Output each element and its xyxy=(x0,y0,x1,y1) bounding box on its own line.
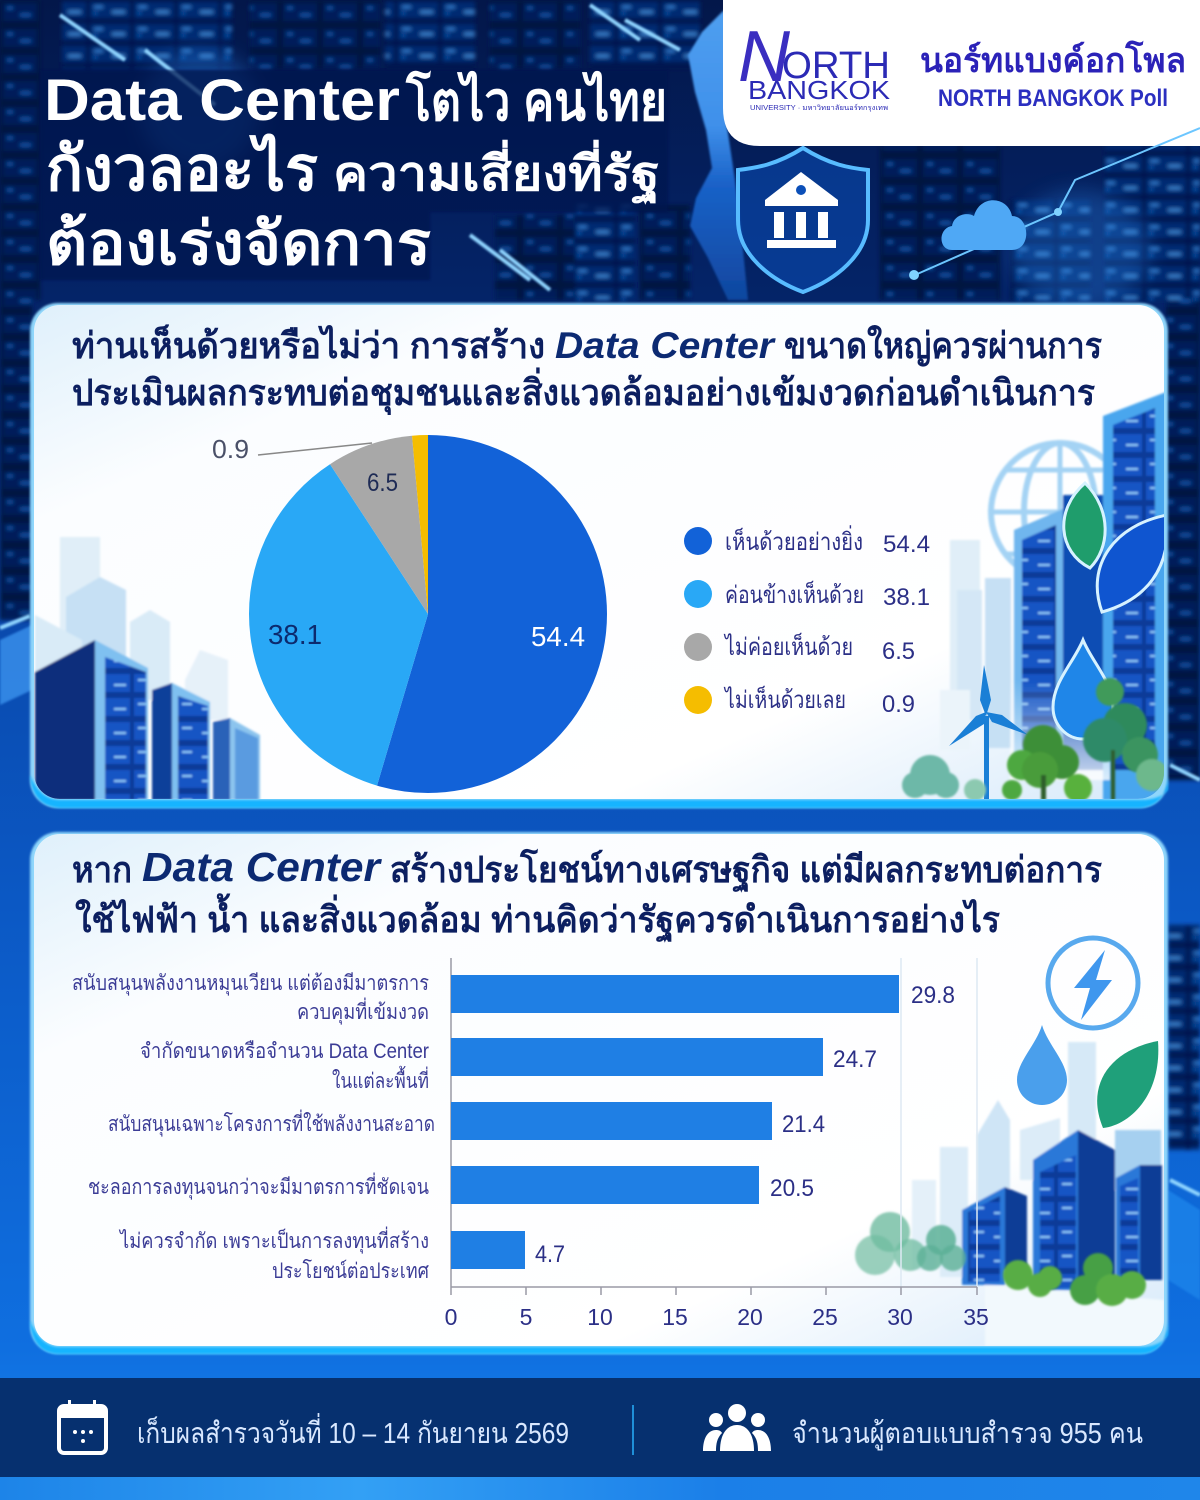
respondents: จำนวนผู้ตอบแบบสำรวจ 955 คน xyxy=(792,1418,1143,1451)
category labels: สนับสนุนพลังงานหมุนเวียน แต่ต้องมีมาตรการ xyxy=(72,972,429,996)
icon: water drop xyxy=(1017,1025,1067,1105)
axis labels: 10 xyxy=(587,1304,613,1330)
title block: ต้องเร่งจัดการ xyxy=(46,210,431,277)
footer band xyxy=(0,1378,1200,1500)
bar values: 20.5 xyxy=(770,1175,814,1202)
illustration: energy, water, data center xyxy=(855,938,1164,1346)
category labels xyxy=(72,972,435,1283)
axis labels: 20 xyxy=(737,1304,763,1330)
pie labels: 6.5 xyxy=(367,469,398,497)
axis labels: 5 xyxy=(520,1304,532,1330)
title block: โตไว คนไทย xyxy=(405,70,667,132)
panel: government action question xyxy=(30,832,1168,1354)
bar values: 24.7 xyxy=(833,1046,877,1073)
legend: ไม่ค่อยเห็นด้วย xyxy=(723,632,853,661)
icon: blue leaf xyxy=(1097,515,1168,612)
logo: North Bangkok University: UNIVERSITY · มหาวิทยาลัยนอร์ทกรุงเทพ xyxy=(750,104,888,112)
icon: government shield xyxy=(738,148,868,292)
trees xyxy=(902,678,1168,802)
icon: lightning bolt in circle xyxy=(1048,938,1138,1028)
illustration: data centers left xyxy=(35,537,260,800)
pie labels: 0.9 xyxy=(212,434,249,464)
category labels: ประโยชน์ต่อประเทศ xyxy=(272,1259,430,1283)
heading: question one xyxy=(72,323,1103,416)
category labels: ไม่ควรจำกัด เพราะเป็นการลงทุนที่สร้าง xyxy=(118,1226,429,1254)
legend: 54.4 xyxy=(883,531,930,558)
axis labels xyxy=(445,1304,989,1330)
title block xyxy=(40,68,668,280)
pie chart xyxy=(212,434,607,793)
icon: calendar xyxy=(59,1400,106,1453)
title block: Data Center xyxy=(44,68,400,133)
heading: question one: ท่านเห็นด้วยหรือไม่ว่า การสร้าง xyxy=(72,323,545,366)
heading: question two: หาก xyxy=(72,849,132,890)
bar values xyxy=(535,982,955,1268)
category labels: สนับสนุนเฉพาะโครงการที่ใช้พลังงานสะอาด xyxy=(108,1109,435,1137)
axis labels: 25 xyxy=(812,1304,838,1330)
icon: people xyxy=(703,1404,771,1451)
logo: North Bangkok University: BANGKOK xyxy=(748,75,891,105)
heading: question one: ขนาดใหญ่ควรผ่านการ xyxy=(784,324,1103,367)
axis labels: 35 xyxy=(963,1304,989,1330)
bar values: 21.4 xyxy=(782,1111,825,1138)
poll name: นอร์ทแบงค์อกโพล xyxy=(920,40,1186,80)
legend: 38.1 xyxy=(883,584,930,611)
category labels: ชะลอการลงทุนจนกว่าจะมีมาตรการที่ชัดเจน xyxy=(88,1172,429,1200)
icon: wind turbine xyxy=(949,665,1028,800)
icon: green leaf xyxy=(1097,1041,1158,1128)
icon: green leaf xyxy=(1064,483,1105,568)
heading: question two: ใช้ไฟฟ้า น้ำ และสิ่งแวดล้อม ท่านคิดว่ารัฐควรดำเนินการอย่างไร xyxy=(75,893,1001,943)
trees xyxy=(855,1212,1146,1306)
logo: North Bangkok University: ORTH xyxy=(782,45,890,87)
legend: ไม่เห็นด้วยเลย xyxy=(723,685,846,714)
pie labels xyxy=(212,434,585,652)
category labels: ในแต่ละพื้นที่ xyxy=(332,1066,429,1093)
poll name xyxy=(920,40,1186,112)
heading: question one: ประเมินผลกระทบต่อชุมชนและสิ่งแวดล้อมอย่างเข้มงวดก่อนดำเนินการ xyxy=(72,367,1096,416)
legend: ค่อนข้างเห็นด้วย xyxy=(725,580,864,609)
pie labels: 38.1 xyxy=(268,619,322,650)
icon: water drop xyxy=(1053,640,1113,739)
legend: เห็นด้วยอย่างยิ่ง xyxy=(725,525,863,556)
bar values: 29.8 xyxy=(911,982,955,1009)
bar chart xyxy=(72,958,989,1330)
logo panel xyxy=(723,0,1200,146)
pie labels: 54.4 xyxy=(531,621,585,652)
heading: question one: Data Center xyxy=(555,325,777,366)
heading: question two: สร้างประโยชน์ทางเศรษฐกิจ แต่มีผลกระทบต่อการ xyxy=(390,848,1103,893)
axis labels: 15 xyxy=(662,1304,688,1330)
logo: North Bangkok University xyxy=(738,17,891,112)
logo: North Bangkok University: N xyxy=(738,17,791,97)
panel: agreement pie question xyxy=(30,303,1168,808)
title block: กังวลอะไร xyxy=(46,133,318,204)
heading: question two: Data Center xyxy=(142,844,382,890)
illustration: environment and data center right xyxy=(902,392,1168,802)
legend: 6.5 xyxy=(882,638,915,665)
category labels: จำกัดขนาดหรือจำนวน Data Center xyxy=(140,1040,429,1063)
survey dates: เก็บผลสำรวจวันที่ 10 – 14 กันยายน 2569 xyxy=(137,1413,569,1450)
axis labels: 30 xyxy=(887,1304,913,1330)
heading: question two xyxy=(72,844,1103,943)
legend: 0.9 xyxy=(882,691,915,718)
bars xyxy=(451,975,899,1269)
title block: ความเสี่ยงที่รัฐ xyxy=(333,139,660,205)
axis labels: 0 xyxy=(445,1304,457,1330)
category labels: ควบคุมที่เข้มงวด xyxy=(297,997,429,1025)
bar values: 4.7 xyxy=(535,1241,565,1268)
map of Thailand silhouette xyxy=(688,10,748,300)
poll name: NORTH BANGKOK Poll xyxy=(938,85,1168,112)
icon: cloud and circuit line xyxy=(909,128,1200,280)
legend xyxy=(684,525,930,718)
